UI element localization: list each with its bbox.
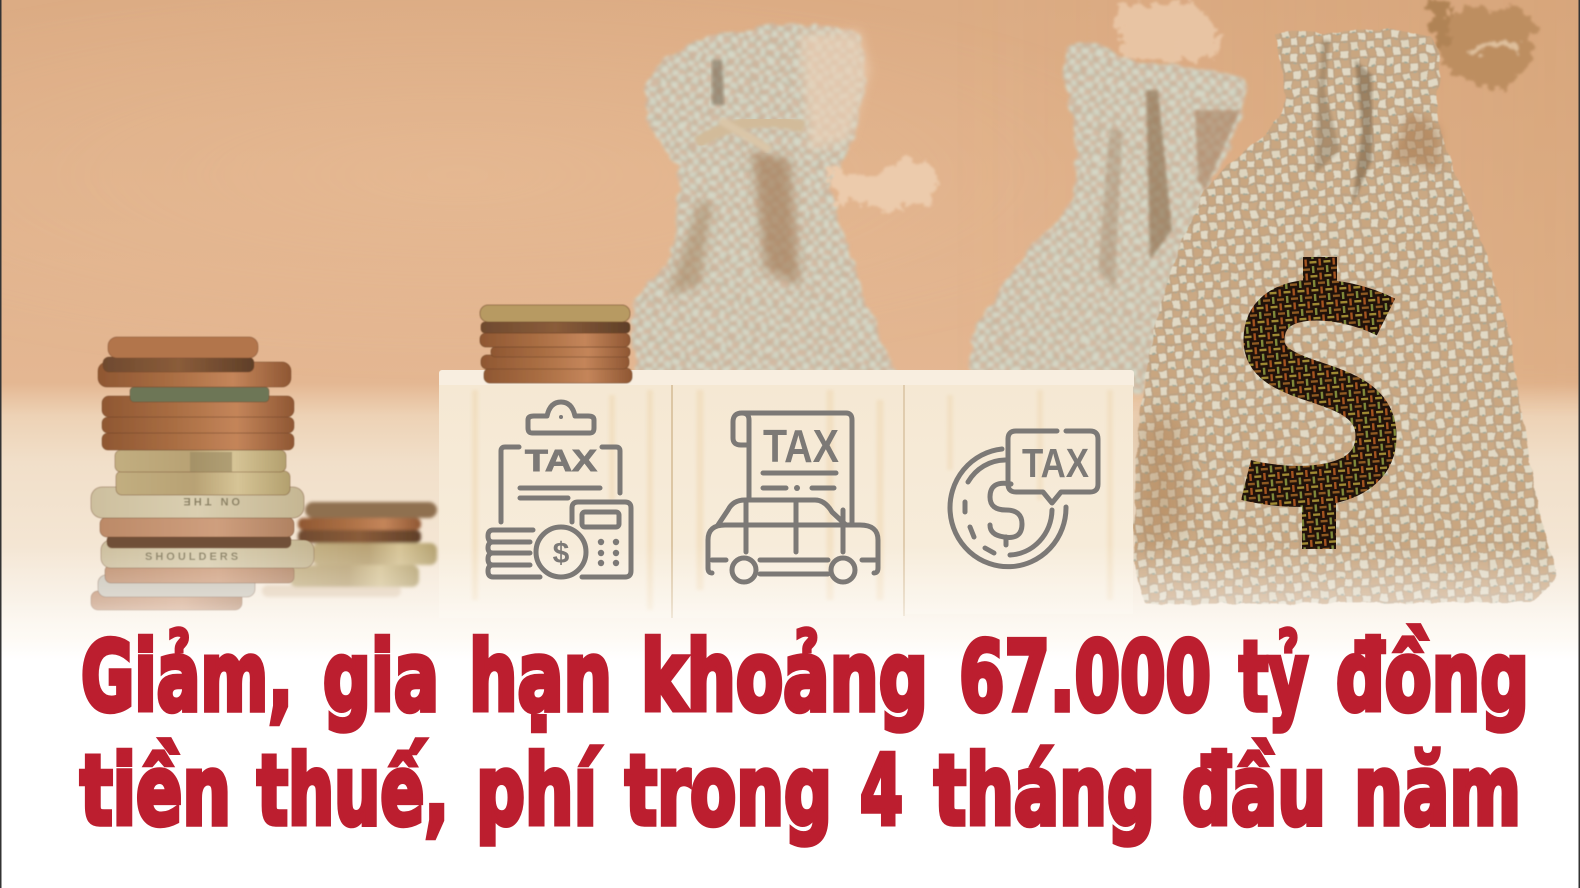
coin stack: small blurred — [262, 502, 437, 597]
coin stack: on block — [480, 305, 632, 383]
icon: clipboard with calculator and coins: $ — [553, 537, 570, 570]
title line 1: khoảng — [641, 621, 928, 733]
icon: clipboard with calculator and coins: TAX — [525, 443, 597, 478]
title line 2: thuế, — [257, 735, 449, 847]
icon: tax paper with car — [708, 413, 878, 582]
white fade into title area — [0, 545, 1580, 660]
coin with edge text — [101, 540, 314, 568]
icon: coin with tax speech bubble: TAX — [1022, 440, 1089, 486]
title line 2: trong — [625, 735, 832, 847]
coin with inverted edge text — [91, 487, 304, 518]
title line 1: gia — [323, 621, 439, 733]
wooden blocks — [439, 370, 1134, 618]
title line 1: Giảm, — [81, 621, 293, 733]
title line 1: 67.000 — [959, 621, 1211, 733]
title line 1: tỷ — [1239, 621, 1308, 733]
sack: blurred back right — [970, 0, 1246, 395]
photo background: wall and table — [0, 0, 1580, 660]
block 1 — [439, 385, 671, 618]
block 3 — [905, 385, 1133, 614]
title line 2: đầu — [1182, 735, 1326, 847]
title line 2: tháng — [934, 735, 1155, 847]
title — [80, 621, 1529, 847]
coin with inverted edge text: ON THE — [180, 495, 240, 507]
title line 1 — [81, 621, 1529, 733]
title line 2: 4 — [860, 735, 903, 847]
title line 2: phí — [476, 735, 601, 847]
sack: blurred back left — [632, 24, 936, 375]
sack: front with dollar sign — [1134, 0, 1556, 604]
neck folds — [1315, 40, 1340, 175]
coin with edge text: SHOULDERS — [145, 551, 241, 563]
title line 1: hạn — [469, 621, 612, 733]
title line 2 — [80, 735, 1521, 847]
icon: tax paper with car: TAX — [763, 420, 839, 472]
rope: front sack — [1428, 0, 1535, 90]
title line 2: tiền — [80, 735, 231, 847]
icon: coin with tax speech bubble — [950, 431, 1098, 567]
block 2 — [673, 385, 903, 618]
icon: clipboard with calculator and coins — [488, 402, 631, 577]
coin stack: tall left — [91, 337, 314, 610]
dollar sign — [1246, 257, 1386, 549]
rope fluff: left sack — [830, 159, 936, 215]
